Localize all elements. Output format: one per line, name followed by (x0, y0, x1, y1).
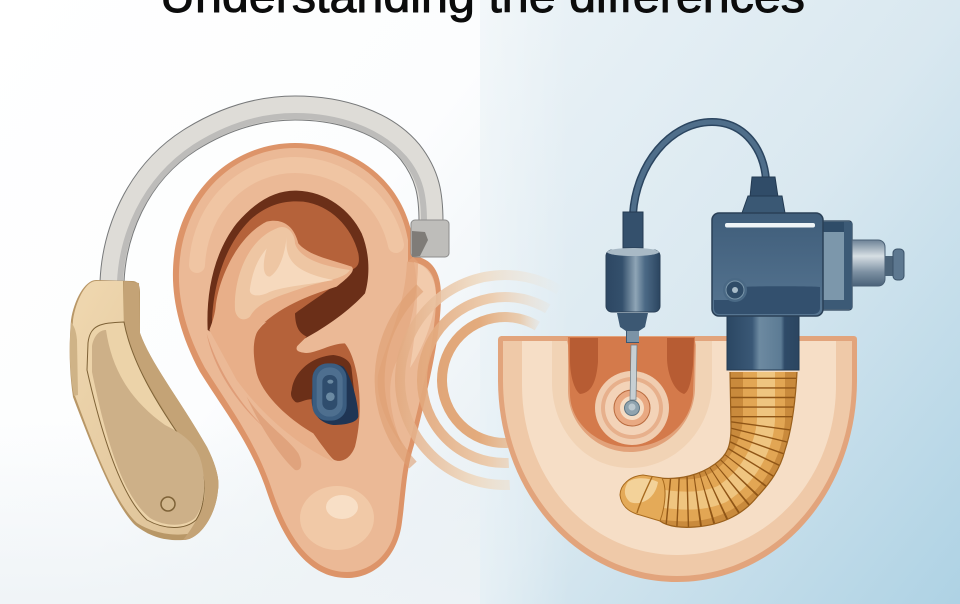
behind-the-ear hearing aid tube (112, 108, 431, 282)
BTE hearing aid body (70, 280, 219, 540)
earlobe highlight (300, 486, 374, 550)
helix highlight (197, 165, 396, 265)
metal stem (852, 240, 894, 286)
electrode probe (606, 122, 766, 416)
antihelix (209, 221, 353, 462)
BTE button (161, 497, 175, 511)
cavity medium tone (212, 201, 359, 327)
lower concha (250, 312, 360, 461)
ear outer shape (173, 143, 441, 578)
outer tissue (498, 336, 857, 582)
cochlea spiral rings (595, 371, 669, 445)
cavity dark (207, 191, 368, 338)
coil tip (620, 475, 665, 521)
in-the-ear hearing aid (312, 363, 358, 425)
probe holder (606, 212, 660, 343)
side block (820, 221, 852, 310)
back of ear fold (410, 262, 436, 368)
cable (633, 122, 766, 214)
antihelix lightest highlight (250, 237, 333, 295)
tragus (297, 285, 382, 353)
inner ear traced details (207, 191, 382, 470)
canal shadow (291, 355, 357, 413)
implant processor (712, 177, 904, 370)
tube connector (411, 220, 449, 257)
inner cavity (552, 336, 712, 468)
top connector (742, 177, 785, 213)
box port (723, 278, 747, 302)
lower column (727, 314, 799, 370)
antihelix mid highlight (235, 227, 350, 319)
sound waves (374, 270, 550, 490)
electrode tip (624, 400, 640, 416)
main box (712, 213, 823, 316)
knob (893, 249, 904, 280)
cochlear implant cross-section (498, 336, 857, 582)
BTE panel (87, 322, 204, 528)
gold electrode coil (620, 368, 797, 527)
coil outline (660, 372, 797, 527)
needle (630, 345, 637, 400)
rim fold shadow (247, 397, 301, 470)
ear (173, 143, 441, 578)
